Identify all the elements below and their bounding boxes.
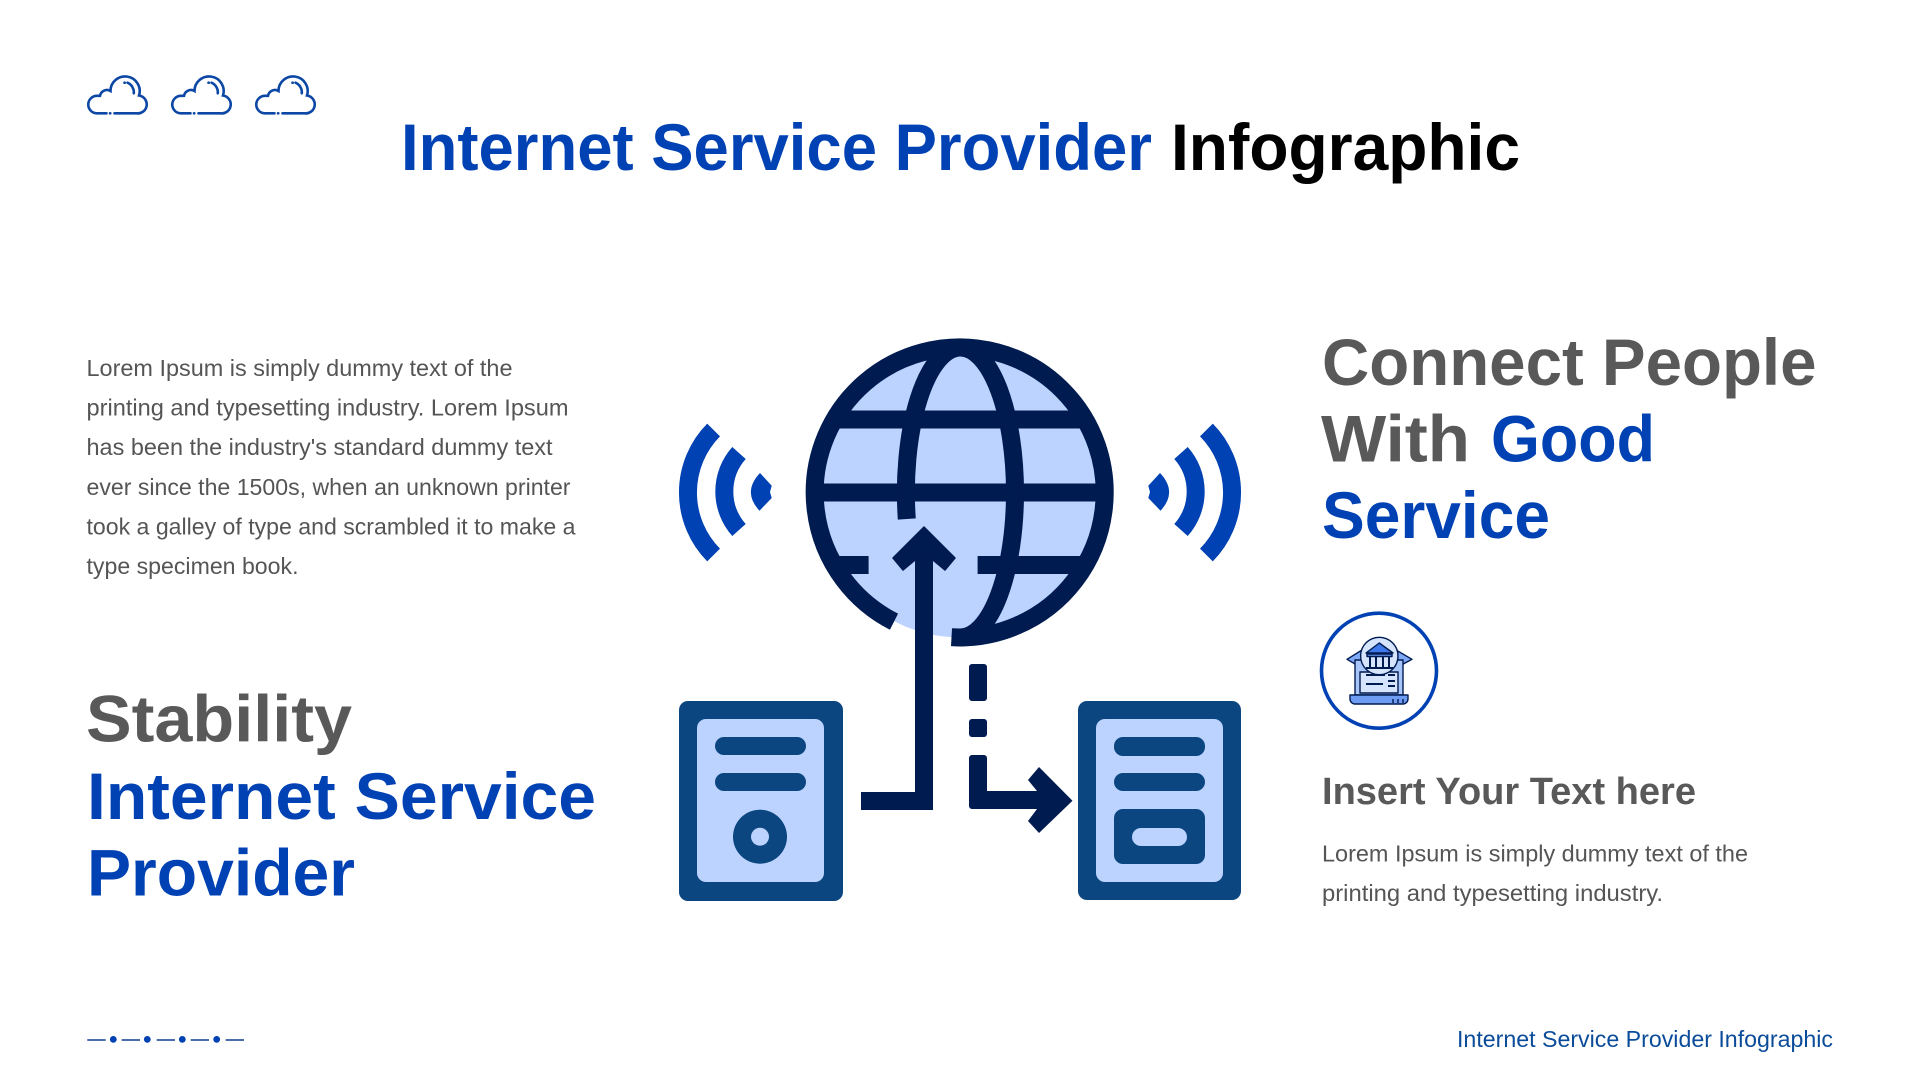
icon: circular badge with laptop and bank [1322, 613, 1436, 728]
subheading: insert your text here: Insert Your Text here [1322, 771, 1696, 813]
text block: left paragraph: took a galley of type and scrambled it to make a [86, 514, 576, 540]
text block: left paragraph: type specimen book. [86, 553, 298, 579]
arrow: up from left server to globe [861, 527, 955, 801]
chart: globe network diagram [679, 347, 1241, 901]
icon: globe [815, 347, 1106, 638]
heading: connect people with good service: Good [1491, 402, 1655, 476]
arrow: dashed from globe to right server [969, 664, 1072, 833]
title: Infographic [1171, 110, 1520, 184]
icon: left wifi signal [688, 430, 772, 555]
heading: connect people with good service: Service [1322, 478, 1550, 552]
text block: right paragraph: printing and typesetting industry. [1322, 880, 1663, 906]
heading: connect people with good service: With [1321, 402, 1470, 476]
heading: stability internet service provider: Stability [86, 682, 352, 756]
heading: stability internet service provider: Internet Service [87, 759, 596, 833]
title: Internet Service Provider [401, 110, 1152, 184]
text block: left paragraph: printing and typesetting industry. Lorem Ipsum [86, 394, 568, 420]
heading: connect people with good service: Connect People [1322, 325, 1816, 399]
text block: left paragraph: ever since the 1500s, when an unknown printer [86, 474, 571, 500]
text block: left paragraph: Lorem Ipsum is simply dummy text of the [86, 355, 512, 381]
icon: right server [1078, 701, 1241, 900]
icon: three clouds [88, 76, 315, 113]
title [401, 110, 1520, 184]
icon: left server [679, 701, 843, 901]
text block: left paragraph: has been the industry's standard dummy text [86, 434, 553, 460]
heading: stability internet service provider [86, 682, 596, 910]
footer label: Internet Service Provider Infographic [1457, 1026, 1833, 1052]
icon: right wifi signal [1148, 430, 1232, 555]
heading: connect people with good service [1321, 325, 1816, 552]
text block: right paragraph: Lorem Ipsum is simply dummy text of the [1322, 840, 1748, 866]
heading: stability internet service provider: Provider [87, 836, 355, 910]
decoration: footer line and dots [87, 1036, 244, 1043]
text block: right paragraph [1322, 840, 1748, 906]
text block: left paragraph [86, 355, 576, 579]
